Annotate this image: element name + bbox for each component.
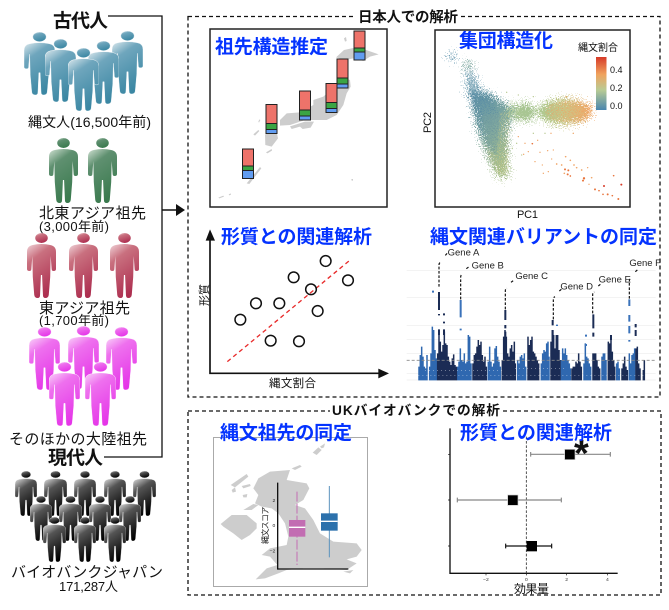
significance star: * (574, 433, 589, 475)
connector: ancient and modern to analysis (104, 16, 162, 457)
panel: analysis in UK Biobank (188, 411, 661, 595)
title: identifying Jomon ancestry: 縄文祖先の同定 (220, 422, 352, 444)
gene labels: Gene C (515, 271, 548, 282)
chart: forest plot: −2 (483, 577, 489, 583)
panel: ancestry estimation map (210, 29, 387, 207)
title: ancestry estimation: 祖先構造推定 (215, 36, 328, 58)
label: other continental ancestry: そのほかの大陸祖先 (9, 431, 147, 448)
panel: identifying Jomon ancestry in UK (214, 422, 368, 586)
gene labels: Gene A (448, 247, 480, 258)
heading: ancient people: 古代人 (53, 10, 108, 32)
gene labels: Gene D (560, 282, 593, 293)
axis label: PC1: PC1 (517, 209, 538, 221)
panel: trait association forest plot (448, 422, 618, 596)
axis label: trait: 形質 (197, 284, 211, 306)
label: 3000 years ago: (3,000年前) (39, 219, 109, 234)
gene labels (448, 247, 661, 293)
arrow into analysis (162, 204, 185, 216)
legend: Jomon proportion: 0.2 (610, 83, 623, 93)
box plot: Jomon score: 2 (273, 498, 276, 504)
gene labels: Gene B (472, 261, 504, 272)
label: Northeast Asian ancestry: 北東アジア祖先 (39, 205, 146, 222)
label: sample size: 171,287人 (59, 579, 118, 594)
panel: trait association scatter (197, 226, 389, 390)
legend: Jomon proportion (578, 41, 623, 111)
icon group: Jomon people (24, 31, 143, 111)
legend: Jomon proportion: 縄文割合 (578, 41, 618, 54)
box plot: Jomon score: −2 (270, 549, 276, 555)
panel: analysis in Japanese (188, 16, 660, 397)
icon group: East Asian ancestry (27, 233, 139, 298)
stacked bar: Kyushu (266, 104, 277, 134)
chart: trait vs Jomon proportion (206, 229, 389, 378)
icon group: Northeast Asian ancestry (49, 138, 117, 203)
label: Biobank Japan: バイオバンクジャパン (11, 564, 163, 581)
legend: Jomon proportion: 0.0 (610, 101, 623, 111)
title: trait association: 形質との関連解析 (460, 422, 612, 444)
axis label: effect size: 効果量 (514, 582, 549, 596)
title: trait association: 形質との関連解析 (221, 226, 372, 248)
panel: Jomon-associated variants (407, 226, 661, 380)
heading: modern people: 現代人 (48, 448, 103, 469)
axis label: PC2: PC2 (422, 112, 434, 133)
heading: analysis in Japanese: 日本人での解析 (358, 8, 458, 26)
gene labels: Gene F (629, 258, 661, 269)
scatter plot: PC1 vs PC2 (449, 54, 622, 200)
label: 1700 years ago: (1,700年前) (39, 313, 109, 328)
icon group: Biobank Japan (15, 471, 156, 562)
icon group: other continental ancestry (29, 326, 137, 426)
chart: forest plot: 0 (525, 577, 528, 583)
label: East Asian ancestry: 東アジア祖先 (39, 300, 130, 317)
stacked bar: Kanto (326, 84, 337, 112)
chart: forest plot (448, 428, 618, 583)
gene labels: Gene E (599, 274, 631, 285)
title: population structure: 集団構造化 (459, 30, 553, 52)
box plot: Jomon score: 0 (273, 523, 276, 529)
map: Japan (218, 37, 379, 198)
chart: Manhattan plot (407, 247, 661, 380)
stacked bar: Hokkaido (354, 31, 365, 60)
stacked bar: Okinawa (242, 149, 254, 178)
chart: forest plot: 2 (565, 577, 568, 583)
panel: population structure PCA (435, 30, 630, 207)
axis label: Jomon proportion: 縄文割合 (269, 376, 316, 390)
legend: Jomon proportion: 0.4 (610, 65, 623, 75)
title: Jomon variants: 縄文関連バリアントの同定 (430, 226, 657, 248)
stacked bar: Kinki (300, 91, 310, 120)
stacked bar: Tohoku (337, 59, 348, 88)
label: Jomon: 縄文人(16,500年前) (28, 114, 151, 130)
chart: forest plot: 4 (606, 577, 609, 583)
box plot: Jomon score (260, 483, 348, 569)
box plot: Jomon score: 縄文スコア (260, 507, 270, 544)
heading: analysis in UK Biobank: UKバイオバンクでの解析 (332, 402, 500, 418)
map: Great Britain and Ireland (221, 443, 362, 579)
